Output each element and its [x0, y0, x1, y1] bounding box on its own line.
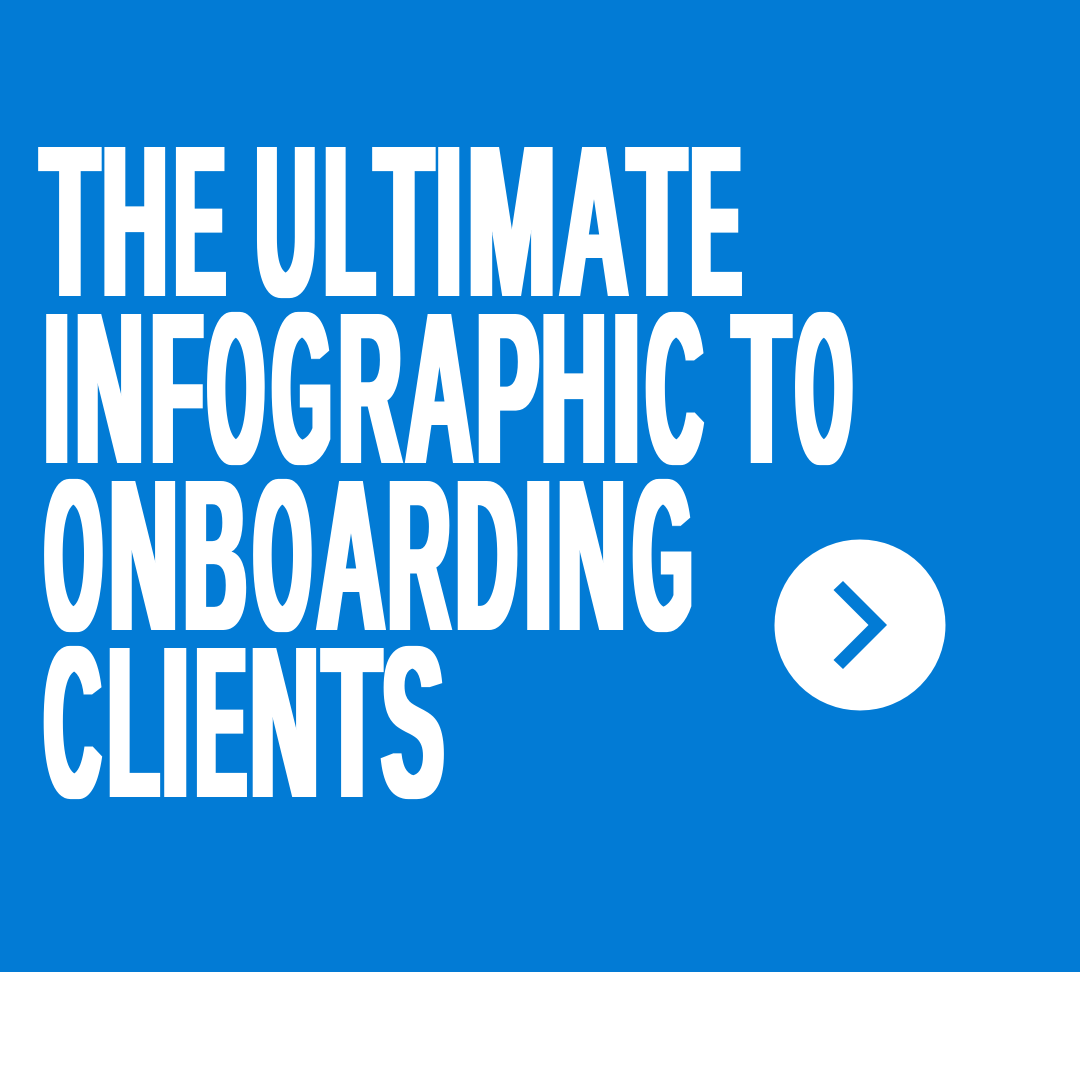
title line 3: I: [525, 434, 552, 676]
title line 2: F: [151, 267, 203, 509]
title line 2: N: [75, 267, 144, 509]
title line 2: C: [646, 267, 702, 509]
title line 2: T: [733, 267, 790, 509]
title line 1: U: [256, 100, 316, 342]
title line 2: I: [613, 267, 640, 509]
title line 1: T: [41, 100, 99, 342]
title line 3: R: [388, 434, 450, 676]
title line 3: O: [45, 434, 102, 676]
title line 1: E: [175, 100, 225, 342]
title line 1: T: [375, 100, 433, 342]
title line 4: I: [162, 601, 189, 843]
title line 1: M: [468, 100, 556, 342]
title line 4: L: [108, 601, 159, 843]
icon: next arrow in circle: [774, 540, 946, 710]
title line 1: T: [628, 100, 686, 342]
title line 3: D: [456, 434, 517, 676]
title line 4: N: [250, 601, 318, 843]
title line 3: N: [109, 434, 178, 676]
title line 1: A: [560, 100, 628, 342]
title: [41, 100, 852, 843]
title line 2: I: [44, 267, 69, 509]
title line 3: O: [254, 434, 311, 676]
title: E: [691, 100, 741, 342]
title line 2: O: [208, 267, 264, 509]
title line 2: R: [339, 267, 401, 509]
title: S: [382, 601, 444, 843]
title line 2: A: [406, 267, 472, 509]
title: G: [634, 434, 692, 676]
title line 2: H: [541, 267, 606, 509]
text: O: [796, 267, 852, 509]
title line 3: N: [557, 434, 626, 676]
title line 2: G: [273, 267, 331, 509]
title line 1: I: [436, 100, 461, 342]
title line 2: P: [476, 267, 538, 509]
title line 4: T: [323, 601, 381, 843]
title line 4: E: [196, 601, 246, 843]
title line 1: L: [324, 100, 375, 342]
title line 3: B: [184, 434, 246, 676]
title line 1: H: [102, 100, 167, 342]
title line 4: C: [44, 601, 100, 843]
title line 3: A: [318, 434, 384, 676]
